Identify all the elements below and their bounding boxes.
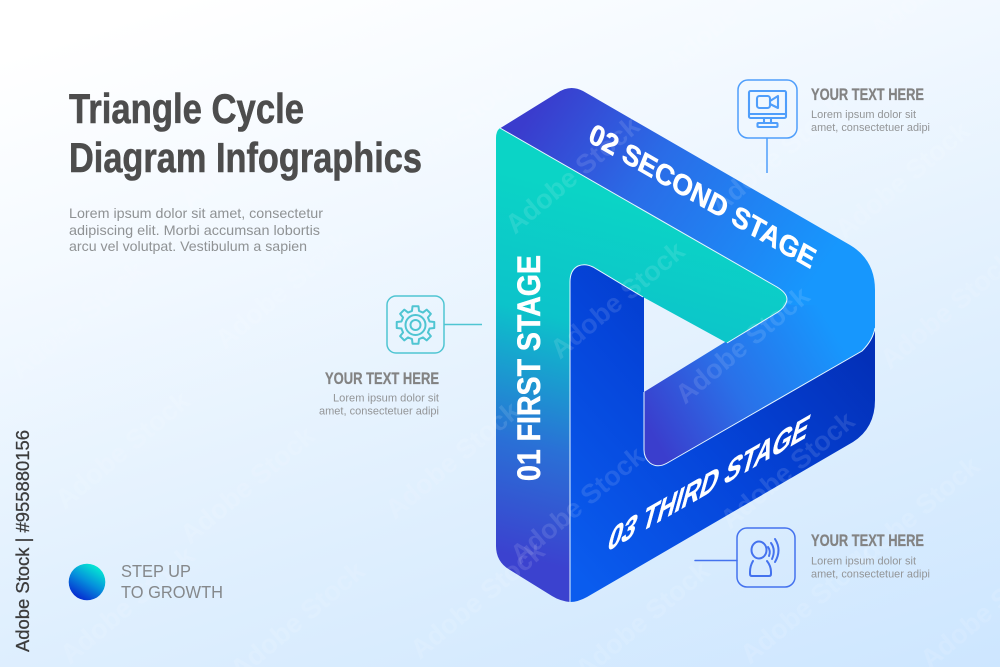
callout text: Lorem ipsum dolor sit <box>333 392 439 404</box>
watermark pattern: Adobe Stock <box>380 65 526 195</box>
title: Diagram Infographics <box>69 134 422 181</box>
intro paragraph: adipiscing elit. Morbi accumsan lobortis <box>69 222 320 238</box>
watermark pattern: Adobe Stock <box>175 420 321 550</box>
watermark pattern: Adobe Stock <box>5 255 151 385</box>
callout text: YOUR TEXT HERE <box>811 532 924 550</box>
watermark pattern: Adobe Stock <box>175 85 321 215</box>
callout: third stage: amet, consectetuer adipi <box>811 568 930 580</box>
callout: second stage <box>738 80 930 173</box>
title: Triangle Cycle <box>69 85 304 132</box>
watermark pattern: Adobe Stock <box>735 540 881 667</box>
title <box>69 85 422 181</box>
callout text: YOUR TEXT HERE <box>325 370 439 388</box>
watermark pattern: Adobe Stock <box>500 110 646 240</box>
watermark pattern: Adobe Stock <box>380 395 526 525</box>
second stage lower arm <box>644 305 875 466</box>
icon: gear <box>387 296 482 353</box>
callout: third stage: Lorem ipsum dolor sit <box>811 556 916 568</box>
watermark pattern: Adobe Stock <box>545 235 691 365</box>
logo: gradient ball with tagline: TO GROWTH <box>121 582 223 602</box>
callout text <box>319 370 439 418</box>
watermark pattern: Adobe Stock <box>840 450 986 580</box>
watermark pattern: Adobe Stock <box>670 280 816 410</box>
intro paragraph <box>69 205 323 254</box>
callout text: amet, consectetuer adipi <box>319 406 439 418</box>
callout: second stage: Lorem ipsum dolor sit <box>811 109 916 121</box>
third stage face <box>570 255 875 602</box>
label: 02 second stage: 02 SECOND STAGE <box>585 118 820 275</box>
callout: first stage <box>319 296 482 418</box>
impossible triangle diagram <box>496 88 875 602</box>
watermark pattern: Adobe Stock <box>705 90 851 220</box>
callout: third stage <box>695 528 930 587</box>
icon: monitor with video camera <box>738 80 797 173</box>
icon: person speaking <box>695 528 795 587</box>
label: 01 first stage: 01 FIRST STAGE <box>511 255 547 481</box>
watermark pattern: Adobe Stock <box>505 440 651 570</box>
watermark pattern: Adobe Stock <box>830 115 976 245</box>
stock id side text: Adobe Stock | #955880156 <box>13 430 33 652</box>
second stage face <box>500 88 875 310</box>
logo: gradient ball with tagline: STEP UP <box>121 561 191 581</box>
watermark pattern: Adobe Stock <box>45 50 191 180</box>
intro paragraph: Lorem ipsum dolor sit amet, consectetur <box>69 205 323 221</box>
watermark pattern: Adobe Stock <box>715 405 861 535</box>
watermark pattern: Adobe Stock <box>50 385 196 515</box>
callout text: YOUR TEXT HERE <box>811 86 924 104</box>
intro paragraph: arcu vel volutpat. Vestibulum a sapien <box>69 238 307 254</box>
logo: gradient ball with tagline <box>69 561 223 602</box>
watermark pattern: Adobe Stock <box>405 535 551 665</box>
first stage face <box>496 128 787 602</box>
edge highlights <box>500 128 875 602</box>
watermark pattern: Adobe Stock <box>55 540 201 667</box>
watermark pattern: Adobe Stock <box>210 225 356 355</box>
label: 03 third stage: 03 THIRD STAGE <box>604 407 814 560</box>
callout: second stage: amet, consectetuer adipi <box>811 122 930 134</box>
